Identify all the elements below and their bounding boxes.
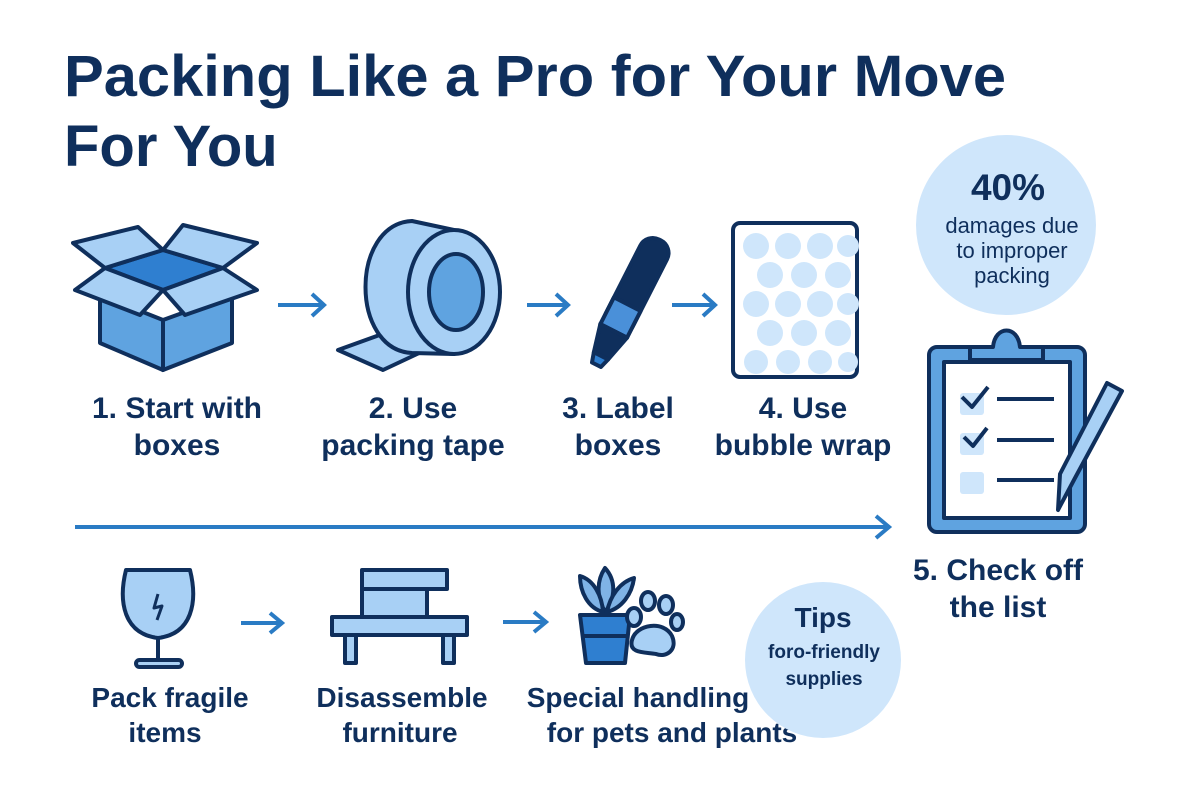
bottom labels: furniture xyxy=(342,717,458,748)
step 5 label: the list xyxy=(950,591,1046,624)
arrow 4 xyxy=(241,613,282,633)
step labels top: boxes xyxy=(575,429,661,462)
step labels top xyxy=(92,392,891,462)
bottom labels: Special handling xyxy=(527,682,749,713)
stat circle: 40% xyxy=(916,135,1096,315)
bottom labels xyxy=(91,682,797,748)
bottom labels: for pets and plants xyxy=(547,717,797,748)
step labels top: boxes xyxy=(134,429,220,462)
icon: tape xyxy=(338,221,500,370)
step labels top: 2. Use xyxy=(369,392,457,425)
icon: box xyxy=(73,225,257,370)
stat circle: 40%: packing xyxy=(974,263,1050,288)
step labels top: bubble wrap xyxy=(715,429,891,462)
icon: furniture xyxy=(332,570,467,663)
arrow 5 xyxy=(503,612,546,632)
arrow 2 xyxy=(527,294,568,316)
tips circle: foro-friendly xyxy=(768,642,880,663)
icon: plant and paw xyxy=(580,568,683,663)
arrow 3 xyxy=(672,294,715,316)
icon: clipboard xyxy=(929,330,1122,532)
bottom labels: Pack fragile xyxy=(91,682,249,713)
title: Packing Like a Pro for Your Move xyxy=(64,44,1006,109)
stat circle: 40%: to improper xyxy=(956,238,1068,263)
bottom labels: items xyxy=(128,717,202,748)
tips circle xyxy=(745,582,901,738)
tips circle: supplies xyxy=(785,669,863,690)
step 5 label: 5. Check off xyxy=(913,554,1084,587)
bottom labels: Disassemble xyxy=(316,682,488,713)
icon: marker xyxy=(583,233,673,372)
title: For You xyxy=(64,114,278,179)
stat circle: 40%: 40% xyxy=(971,167,1045,208)
long arrow xyxy=(75,516,889,538)
step labels top: 3. Label xyxy=(562,392,674,425)
tips circle: Tips xyxy=(794,602,852,633)
step 5 label xyxy=(913,554,1084,624)
step labels top: packing tape xyxy=(321,429,505,462)
icon: bubble wrap xyxy=(733,223,859,377)
icon: glass xyxy=(123,570,193,667)
step labels top: 4. Use xyxy=(759,392,847,425)
title xyxy=(64,44,1006,179)
step labels top: 1. Start with xyxy=(92,392,262,425)
arrow 1 xyxy=(278,294,324,316)
stat circle: 40%: damages due xyxy=(945,213,1079,238)
